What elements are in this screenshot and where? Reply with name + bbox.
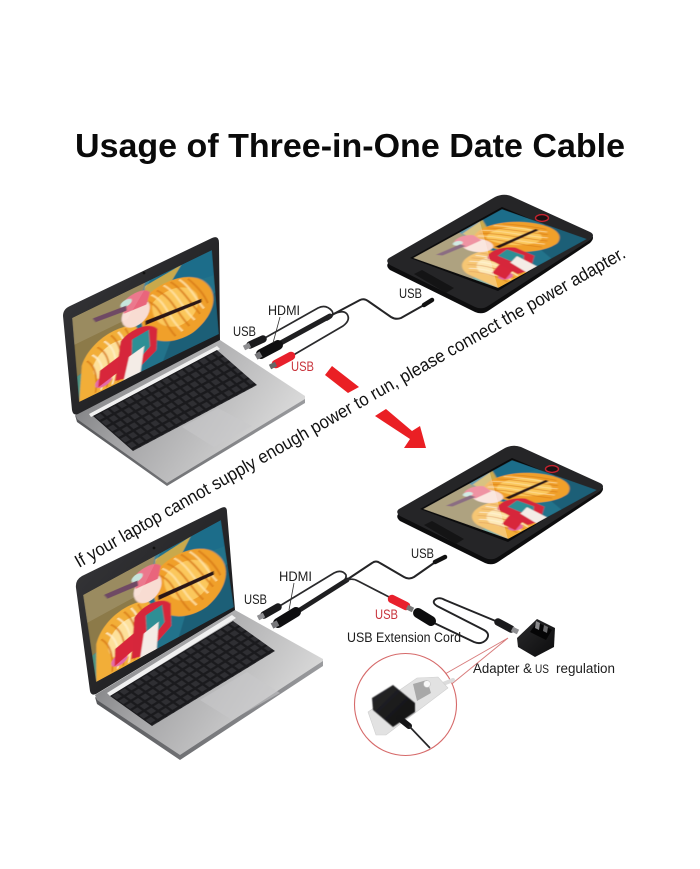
label: adapter and US regulation: Adapter &: [473, 661, 532, 676]
red USB branch cable: [347, 579, 391, 598]
cables (top): [244, 299, 432, 367]
laptop screen: [63, 237, 220, 414]
keyboard: [110, 621, 275, 726]
tablet (top): [387, 195, 593, 313]
tablet screen: [413, 209, 589, 289]
tablet shortcut strip: [424, 521, 464, 544]
label: USB: USB: [233, 324, 256, 339]
red USB branch cable: [290, 312, 348, 357]
label: tablet USB: USB: [411, 546, 434, 561]
USB branch cable: [263, 307, 333, 339]
tablet body: [397, 448, 603, 564]
tablet USB plug: [435, 557, 445, 562]
tablet shortcut strip: [414, 270, 454, 293]
tablet body: [387, 197, 593, 313]
red dial: [536, 215, 548, 221]
diagram: with power adapter: [76, 446, 615, 760]
US regulation plug: [368, 677, 453, 748]
main HDMI cable: [295, 580, 347, 613]
red USB plug: [276, 356, 291, 364]
HDMI plug: [278, 612, 296, 623]
extension USB plug: [498, 622, 511, 629]
label: adapter and US regulation: US: [535, 664, 549, 676]
diagram: direct connection: [63, 195, 593, 486]
extension cord loop: [432, 598, 498, 643]
callout pointer lines: [445, 638, 508, 687]
USB branch cable: [278, 571, 346, 607]
label: red USB: USB: [375, 607, 398, 622]
label: HDMI: HDMI: [268, 303, 300, 318]
label: USB Extension Cord: USB Extension Cord: [347, 630, 461, 645]
laptop (top): [63, 237, 305, 486]
HDMI pointer: [289, 583, 294, 610]
callout circle: [354, 654, 456, 756]
laptop screen: [76, 507, 235, 695]
title: Usage of Three-in-One Date Cable: [75, 127, 625, 164]
cables (bottom): [258, 557, 518, 643]
USB plug: [250, 339, 263, 345]
label: tablet USB: USB: [399, 286, 422, 301]
HDMI plug: [261, 345, 278, 354]
label: adapter and US regulation: regulation: [556, 661, 615, 676]
HDMI pointer: [273, 317, 280, 343]
tablet (bottom): [397, 446, 603, 564]
power adapter: [517, 619, 555, 657]
USB plug: [264, 607, 278, 615]
tablet USB plug: [424, 300, 432, 305]
laptop (bottom): [76, 507, 323, 760]
label: red USB: USB: [291, 359, 314, 374]
red USB plug: [392, 599, 406, 606]
label: HDMI: HDMI: [279, 569, 312, 584]
diagonal note: If your laptop cannot supply enough power to run, please connect the power adapter.: [71, 243, 629, 571]
label: USB: USB: [244, 592, 267, 607]
main HDMI cable: [277, 316, 330, 345]
red dial: [546, 466, 558, 472]
tablet screen: [423, 460, 599, 540]
label: adapter and US regulation: [473, 661, 615, 676]
keyboard: [93, 350, 257, 451]
extension female socket: [418, 613, 431, 621]
laptop base: [95, 610, 323, 760]
red arrow: [325, 366, 426, 448]
laptop base: [75, 340, 305, 486]
zoom callout: [354, 638, 508, 756]
